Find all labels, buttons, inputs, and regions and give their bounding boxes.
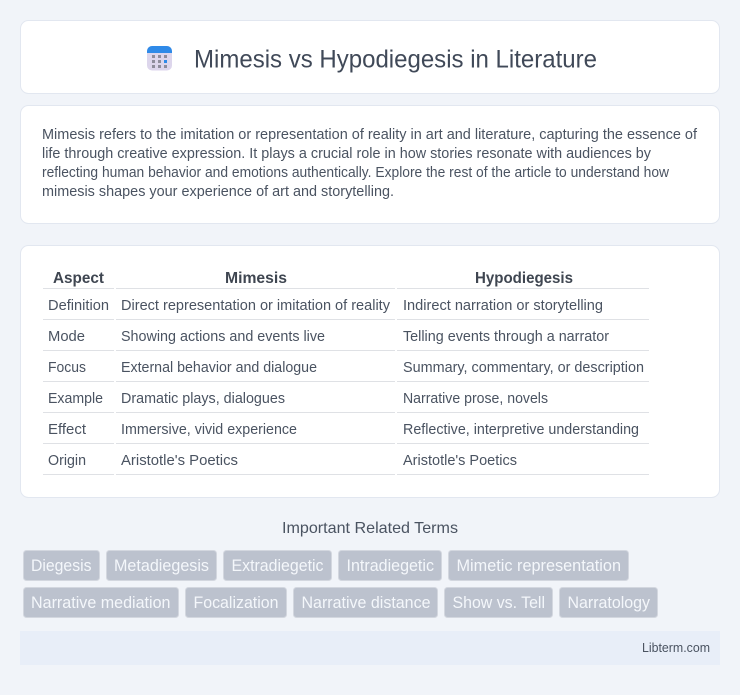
tag: Metadiegesis (106, 550, 216, 580)
tag: Mimetic representation (448, 550, 628, 580)
tag: Show vs. Tell (444, 588, 552, 618)
text block: intro paragraph: reflecting human behavior and emotions authentically. Explore the rest of the article to understand how (42, 165, 669, 181)
row: origin: Aristotle's Poetics (403, 453, 517, 469)
tag: Intradiegetic: Intradiegetic (346, 557, 434, 575)
tag: Extradiegetic: Extradiegetic (232, 557, 324, 575)
row: definition: Indirect narration or storytelling (403, 298, 603, 314)
row: origin (48, 453, 517, 469)
row: focus (48, 360, 644, 376)
row: effect: Immersive, vivid experience (121, 422, 297, 438)
text block: intro paragraph (42, 127, 698, 200)
row: focus: External behavior and dialogue (121, 360, 317, 376)
row: example (48, 391, 548, 407)
tag: Narrative distance (294, 588, 438, 618)
tag: Extradiegetic (224, 550, 332, 580)
tag: Focalization (186, 588, 286, 618)
tag: Narrative mediation (24, 588, 178, 618)
table header: Hypodiegesis (475, 270, 573, 287)
row: mode: Telling events through a narrator (403, 329, 609, 345)
tag: Narrative mediation: Narrative mediation (31, 594, 170, 612)
panel: title header (20, 20, 720, 94)
table header (53, 270, 573, 287)
row: definition: Direct representation or imitation of reality (121, 298, 391, 314)
row: example: Example (48, 391, 103, 407)
title: Mimesis vs Hypodiegesis in Literature (194, 46, 597, 74)
tag: Show vs. Tell: Show vs. Tell (452, 594, 545, 612)
tag: Metadiegesis: Metadiegesis (114, 557, 209, 575)
text block: intro paragraph: Mimesis refers to the imitation or representation of reality in art and literature, capturing the essence of (42, 127, 698, 143)
tag: Mimetic representation: Mimetic representation (456, 557, 621, 575)
panel: introduction (20, 106, 720, 224)
row: effect: Reflective, interpretive understanding (403, 422, 639, 438)
text block: intro paragraph: life through creative expression. It plays a crucial role in how stories resonate with audiences by (42, 146, 652, 162)
row: definition: Definition (48, 298, 109, 314)
row: origin: Origin (48, 453, 86, 469)
row: focus: Focus (48, 360, 86, 376)
row: definition (48, 298, 603, 314)
row: origin: Aristotle's Poetics (121, 453, 238, 469)
tag: Narrative distance: Narrative distance (302, 594, 430, 612)
footer (20, 631, 720, 665)
text block: intro paragraph: mimesis shapes your experience of art and storytelling. (42, 184, 394, 200)
row: mode: Mode (48, 329, 85, 345)
tag: Focalization: Focalization (194, 594, 278, 612)
row: mode: Showing actions and events live (121, 329, 325, 345)
panel: comparison table (20, 246, 720, 498)
tags: related terms (24, 550, 658, 618)
tag: Narratology (560, 588, 658, 618)
tag: Diegesis (24, 550, 100, 580)
footer: Libterm.com (642, 641, 710, 655)
row: effect: Effect (48, 422, 86, 438)
table header: Aspect (53, 270, 105, 287)
tag: Intradiegetic (338, 550, 442, 580)
heading: related terms: Important Related Terms (282, 520, 458, 537)
tag: Diegesis: Diegesis (31, 557, 92, 575)
row: example: Narrative prose, novels (403, 391, 548, 407)
row: example: Dramatic plays, dialogues (121, 391, 285, 407)
tag: Narratology: Narratology (568, 594, 651, 612)
row: focus: Summary, commentary, or description (403, 360, 644, 376)
icon: calendar (147, 46, 172, 70)
row: mode (48, 329, 609, 345)
row: effect (48, 422, 639, 438)
table header: Mimesis (225, 270, 287, 287)
